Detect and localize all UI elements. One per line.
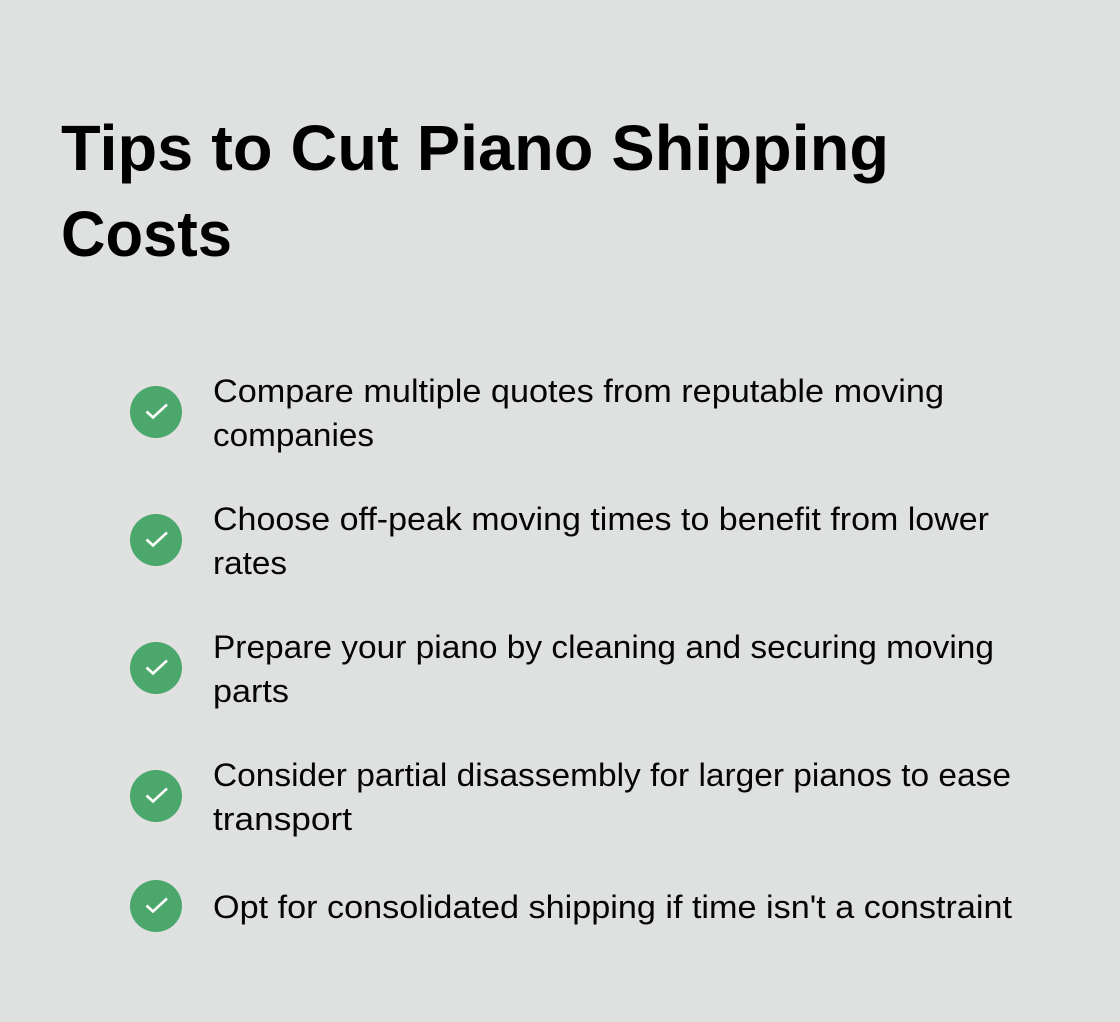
text: partial disassembly: transport	[213, 801, 352, 837]
title	[61, 112, 889, 270]
title: Tips to Cut Piano Shipping	[61, 112, 889, 184]
text: off-peak times: rates	[213, 545, 287, 581]
text: consolidated shipping: Opt for consolidated shipping if time isn't a constraint	[213, 889, 1012, 925]
icon: check circle 2	[130, 514, 182, 566]
text: prepare piano	[213, 629, 994, 709]
item 2: off-peak times	[130, 501, 989, 581]
item 3: prepare piano	[130, 629, 994, 709]
icon: check circle 1	[130, 386, 182, 438]
item 1: compare quotes	[130, 373, 944, 453]
text: compare quotes: Compare multiple quotes from reputable moving	[213, 373, 944, 409]
text: off-peak times	[213, 501, 989, 581]
text: compare quotes: companies	[213, 417, 374, 453]
icon: check circle 3	[130, 642, 182, 694]
icon: check circle 4	[130, 770, 182, 822]
text: off-peak times: Choose off-peak moving times to benefit from lower	[213, 501, 989, 537]
text: partial disassembly: Consider partial disassembly for larger pianos to ease	[213, 757, 1011, 793]
text: prepare piano: parts	[213, 673, 289, 709]
item 4: partial disassembly	[130, 757, 1011, 837]
text: prepare piano: Prepare your piano by cleaning and securing moving	[213, 629, 994, 665]
title: Costs	[61, 198, 232, 270]
text: compare quotes	[213, 373, 944, 453]
item 5: consolidated shipping	[130, 880, 1012, 932]
checklist	[130, 373, 1012, 932]
icon: check circle 5	[130, 880, 182, 932]
text: partial disassembly	[213, 757, 1011, 837]
